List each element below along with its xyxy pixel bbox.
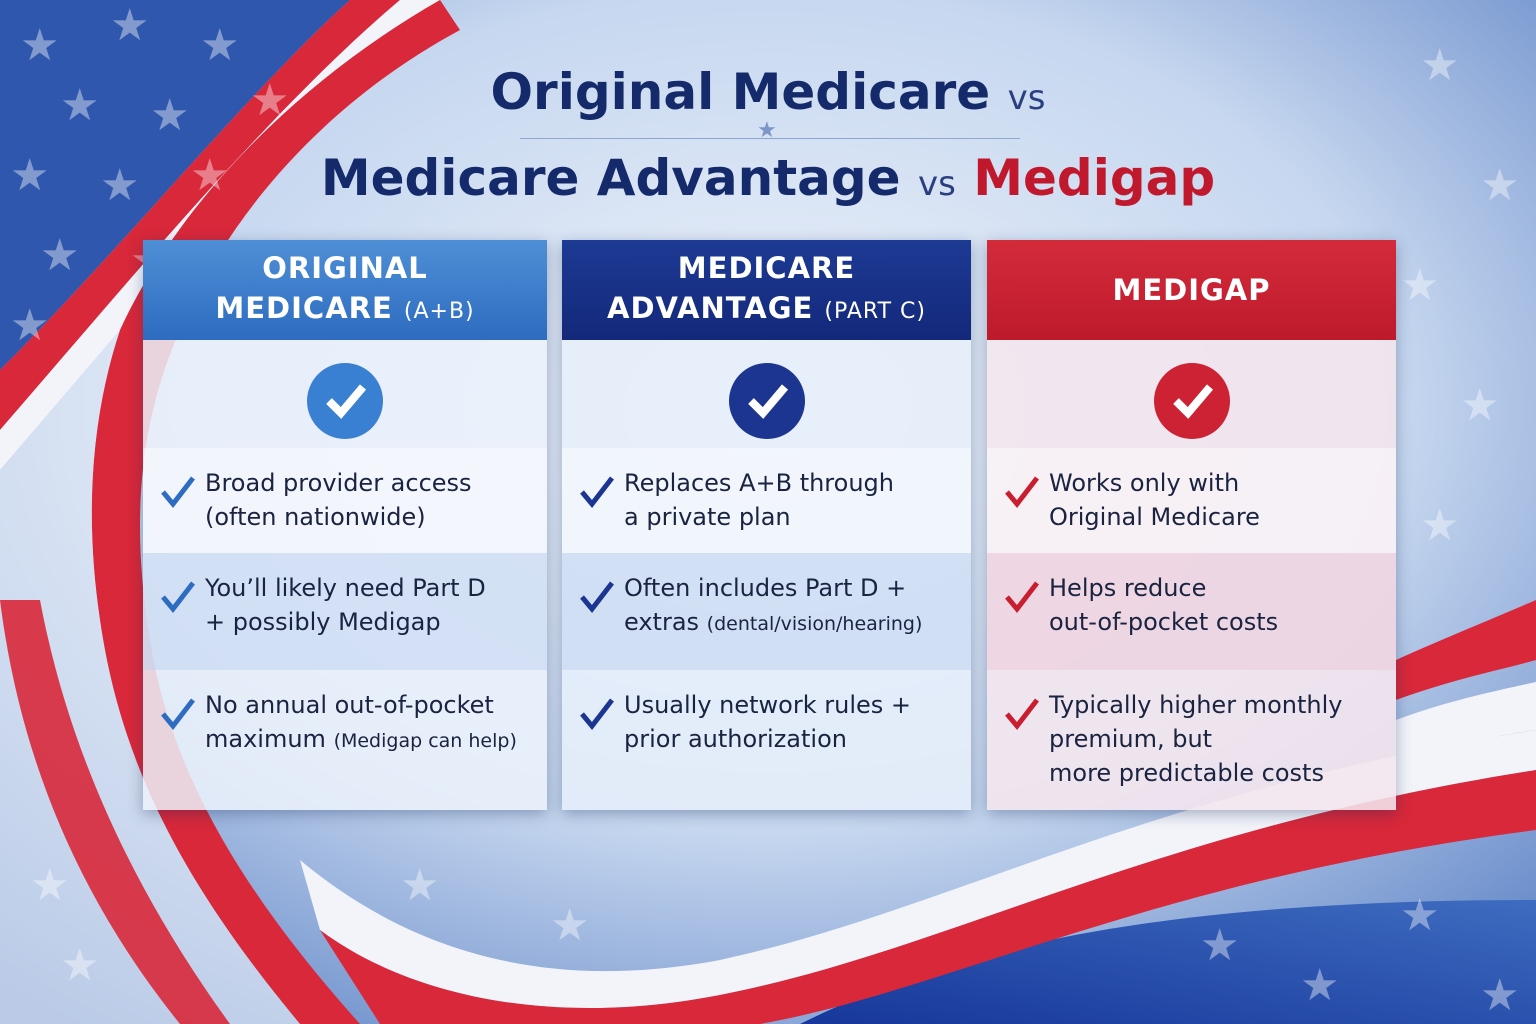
header: advantage: MEDICARE (678, 251, 855, 285)
panel: medicare advantage (562, 240, 971, 810)
row 1 (987, 448, 1396, 553)
panel: original medicare (143, 240, 547, 810)
header: advantage: ADVANTAGE (PART C) (607, 291, 926, 325)
row 3 (161, 691, 517, 753)
background flag: ★ (150, 90, 189, 141)
background flag: ★ (1420, 40, 1459, 91)
panel: medigap (987, 240, 1396, 810)
background flag: ★ (60, 940, 99, 991)
background flag: ★ (110, 0, 149, 51)
header: medigap: MEDIGAP (1112, 273, 1271, 307)
row 1: Broad provider access (205, 469, 472, 497)
title (321, 63, 1215, 207)
background flag: ★ (1300, 960, 1339, 1011)
background flag: ★ (1480, 970, 1519, 1021)
background flag: ★ (1480, 160, 1519, 211)
header: original (143, 240, 547, 340)
row 2: Often includes Part D + (624, 574, 906, 602)
row 2 (987, 553, 1396, 670)
header: original: ORIGINAL (262, 251, 428, 285)
row 1: a private plan (624, 503, 791, 531)
row 3: No annual out-of-pocket (205, 691, 494, 719)
row 1: (often nationwide) (205, 503, 426, 531)
background flag: ★ (1400, 260, 1439, 311)
row 1: Works only with (1049, 469, 1239, 497)
row 2 (562, 553, 971, 670)
background flag: ★ (30, 860, 69, 911)
background flag: ★ (1200, 920, 1239, 971)
row 3: Usually network rules + (624, 691, 911, 719)
row 2: out-of-pocket costs (1049, 608, 1278, 636)
background flag: ★ (10, 150, 49, 201)
row 2 (143, 553, 547, 670)
row 3 (1005, 691, 1342, 787)
row 1 (562, 448, 971, 553)
row 1: Replaces A+B through (624, 469, 894, 497)
row 3: premium, but (1049, 725, 1212, 753)
header: medigap (987, 240, 1396, 340)
background flag: ★ (1460, 380, 1499, 431)
background flag: ★ (400, 860, 439, 911)
background flag: ★ (130, 235, 169, 286)
background flag: ★ (250, 75, 289, 126)
icon: check circle (307, 363, 383, 439)
background flag: ★ (60, 80, 99, 131)
row 2: Helps reduce (1049, 574, 1206, 602)
row 3: prior authorization (624, 725, 847, 753)
title: Medicare Advantage vs Medigap (321, 149, 1215, 207)
row 3: more predictable costs (1049, 759, 1324, 787)
header: advantage (562, 240, 971, 340)
icon: check circle (728, 363, 804, 439)
row 2: + possibly Medigap (205, 608, 441, 636)
background flag: ★ (40, 230, 79, 281)
row 3: Typically higher monthly (1049, 691, 1342, 719)
background flag: ★ (20, 20, 59, 71)
row 2: You’ll likely need Part D (205, 574, 486, 602)
row 3: maximum (Medigap can help) (205, 725, 517, 753)
background flag: ★ (550, 900, 589, 951)
background flag: ★ (190, 150, 229, 201)
row 2: extras (dental/vision/hearing) (624, 608, 922, 636)
row 1: Original Medicare (1049, 503, 1260, 531)
background flag: ★ (200, 20, 239, 71)
title: Original Medicare vs (491, 63, 1045, 121)
title: ★ (757, 118, 777, 143)
background flag: ★ (1400, 890, 1439, 941)
background flag: ★ (100, 160, 139, 211)
background flag: ★ (10, 300, 49, 351)
row 1 (143, 448, 547, 553)
icon: check circle (1154, 363, 1230, 439)
header: original: MEDICARE (A+B) (215, 291, 475, 325)
background flag: ★ (1420, 500, 1459, 551)
row 3 (580, 691, 911, 753)
